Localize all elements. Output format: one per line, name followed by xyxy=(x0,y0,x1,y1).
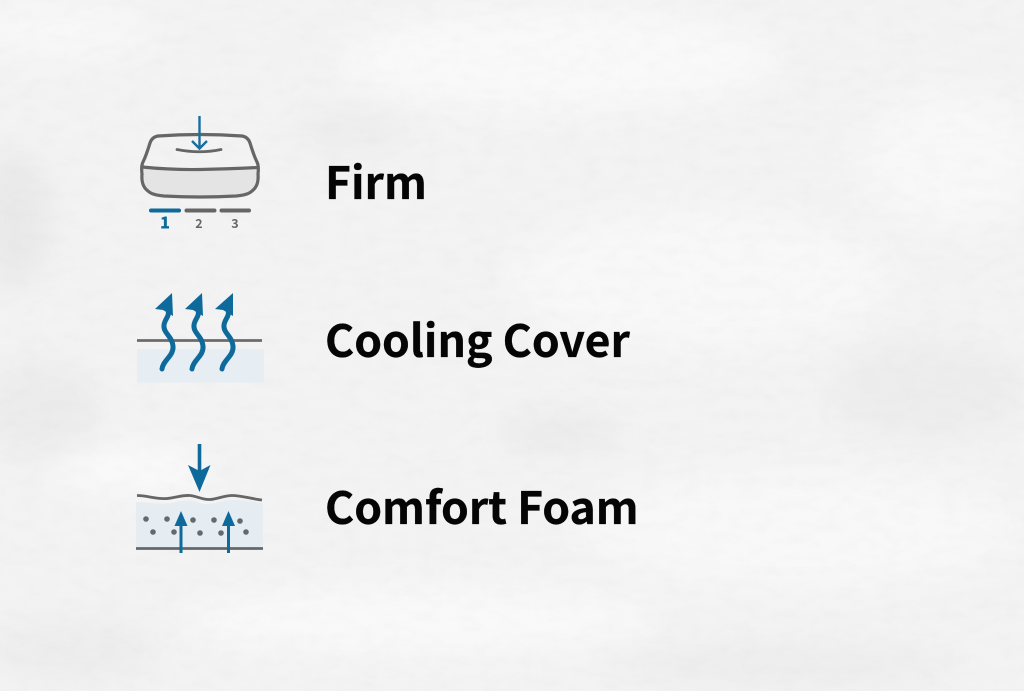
arrow down xyxy=(192,116,207,148)
heading: Cooling Cover: Cooling Cover xyxy=(325,305,630,370)
level numbers: 1 xyxy=(160,210,170,234)
mattress outline xyxy=(142,134,258,197)
mattress side fill xyxy=(142,168,258,196)
heading: Comfort Foam: Comfort Foam xyxy=(325,472,639,537)
icon: firm mattress with level scale: 3 xyxy=(231,213,239,232)
dent xyxy=(177,150,221,152)
level bars xyxy=(151,208,179,212)
icon: firm mattress with level scale: 2 xyxy=(195,213,203,232)
heading: Firm: Firm xyxy=(325,147,427,212)
